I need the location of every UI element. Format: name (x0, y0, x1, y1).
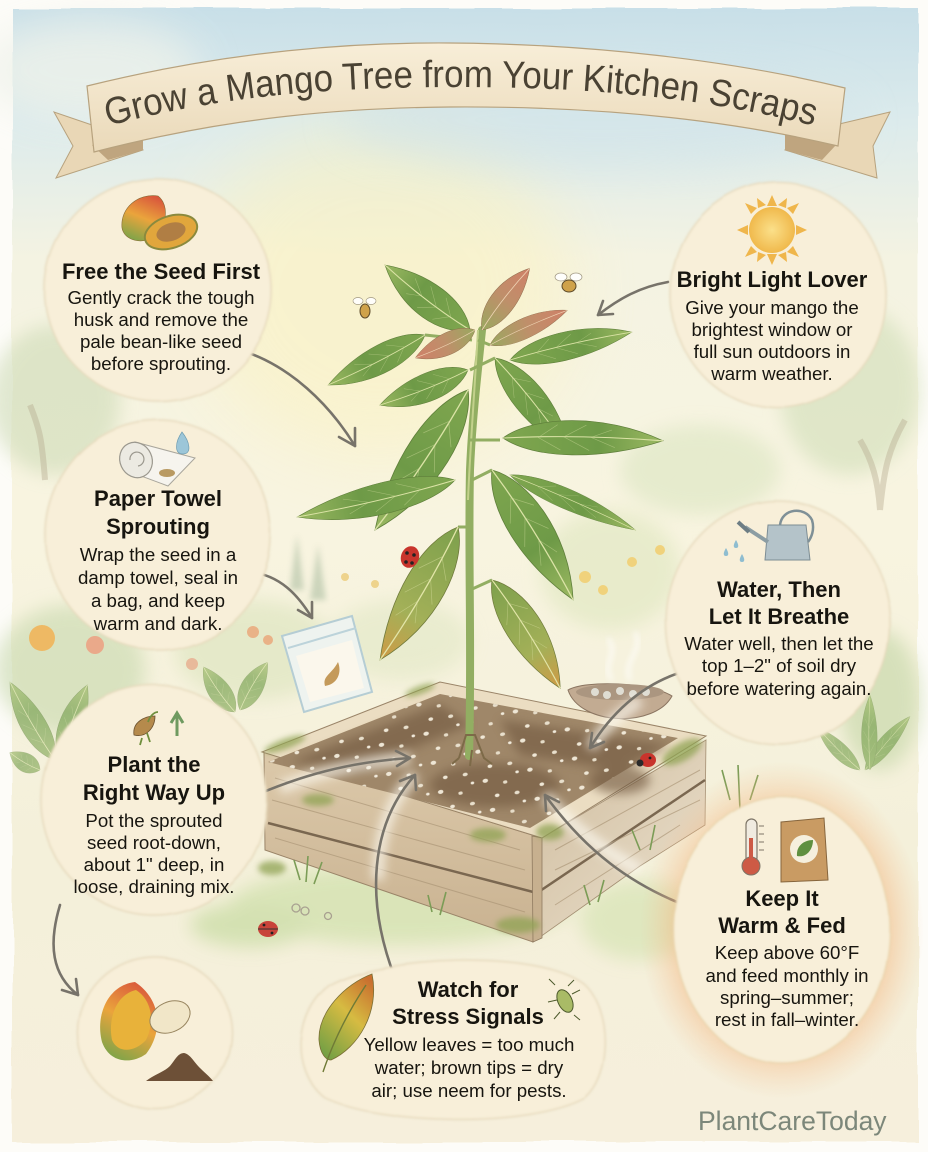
body text: air; use neem for pests. (371, 1080, 567, 1101)
arrow: warm to soil (545, 795, 692, 908)
icon: yellowing leaf (319, 974, 374, 1072)
arrow: water to soil (590, 672, 682, 748)
panel: keep it warm and fed (640, 762, 924, 1098)
heading: Sprouting (106, 514, 210, 539)
icon: mango halves (122, 196, 202, 256)
body text: Keep above 60°F (715, 942, 859, 963)
arrow: plant to seed circle (54, 905, 78, 995)
heading: Watch for (418, 977, 519, 1002)
icon: ladybug on leaf (398, 544, 422, 570)
background foliage (0, 305, 920, 960)
arrow halos near soil (280, 700, 640, 880)
icon: bee left (353, 298, 376, 318)
body text: and feed monthly in (705, 965, 869, 986)
body text: warm weather. (710, 363, 833, 384)
icon: split mango (100, 982, 157, 1060)
body text: Wrap the seed in a (80, 544, 237, 565)
body text: before watering again. (687, 678, 871, 699)
panel: plant the right way up (41, 685, 267, 915)
arrow: seed to plant (240, 350, 355, 446)
heading: Free the Seed First (62, 259, 261, 284)
panel: bright light lover (671, 182, 885, 408)
icon: bee right (555, 273, 582, 292)
arrow: plant to soil (245, 751, 410, 800)
body text: about 1" deep, in (84, 854, 224, 875)
panel: water then let it breathe (666, 501, 890, 745)
body text: Pot the sprouted (85, 810, 223, 831)
heading: Let It Breathe (709, 604, 849, 629)
heading: Stress Signals (392, 1004, 544, 1029)
body text: water; brown tips = dry (374, 1057, 564, 1078)
heading: Paper Towel (94, 486, 222, 511)
heading: Keep It (745, 886, 819, 911)
heading: Plant the (108, 752, 200, 777)
body text: damp towel, seal in (78, 567, 238, 588)
icon: watering can (724, 511, 813, 562)
heading: Water, Then (717, 577, 841, 602)
body text: full sun outdoors in (694, 341, 850, 362)
body text: warm and dark. (93, 613, 222, 634)
arrow: towel to bag (250, 572, 312, 618)
body text: spring–summer; (720, 987, 854, 1008)
icon: sprouting seed with arrow (134, 712, 183, 745)
body text: seed root-down, (87, 832, 221, 853)
icon: ladybug on ground (258, 921, 278, 937)
body text: Give your mango the (685, 297, 859, 318)
body text: Gently crack the tough (68, 287, 254, 308)
body text: Yellow leaves = too much (364, 1034, 574, 1055)
body text: husk and remove the (74, 309, 248, 330)
icon: sun (737, 195, 807, 265)
arrow: sun to plant (598, 282, 668, 315)
icon: bean seed (145, 995, 195, 1039)
heading: Right Way Up (83, 780, 225, 805)
arrows (54, 282, 692, 995)
panel: seed and soil illustration (78, 957, 232, 1109)
panel: watch for stress signals (301, 961, 605, 1119)
body text: pale bean-like seed (80, 331, 242, 352)
heading: Bright Light Lover (677, 267, 868, 292)
panel: paper towel sprouting (45, 420, 271, 650)
banner (53, 42, 891, 210)
icon: paper towel and drop (114, 432, 195, 486)
heading: Warm & Fed (718, 913, 846, 938)
icon: ladybug on bed (636, 753, 656, 767)
body text: top 1–2" of soil dry (702, 655, 857, 676)
body text: a bag, and keep (91, 590, 225, 611)
icon: stone dish with steam (568, 632, 672, 719)
icon: beetle (548, 979, 580, 1020)
watermark: PlantCareToday (698, 1106, 887, 1136)
icon: fertilizer bag (781, 818, 828, 882)
body text: brightest window or (692, 319, 852, 340)
icon: thermometer (742, 819, 764, 875)
body text: loose, draining mix. (74, 876, 234, 897)
body text: rest in fall–winter. (715, 1009, 859, 1030)
icon: sealed seed bag (282, 616, 372, 712)
body text: Water well, then let the (684, 633, 874, 654)
arrow: stress to soil (376, 775, 416, 978)
raised garden bed (258, 681, 758, 942)
mango plant (294, 253, 663, 766)
title: Grow a Mango Tree from Your Kitchen Scraps (106, 60, 816, 126)
panel: free the seed first (45, 179, 271, 401)
body text: before sprouting. (91, 353, 231, 374)
icon: soil mound (146, 1053, 213, 1081)
